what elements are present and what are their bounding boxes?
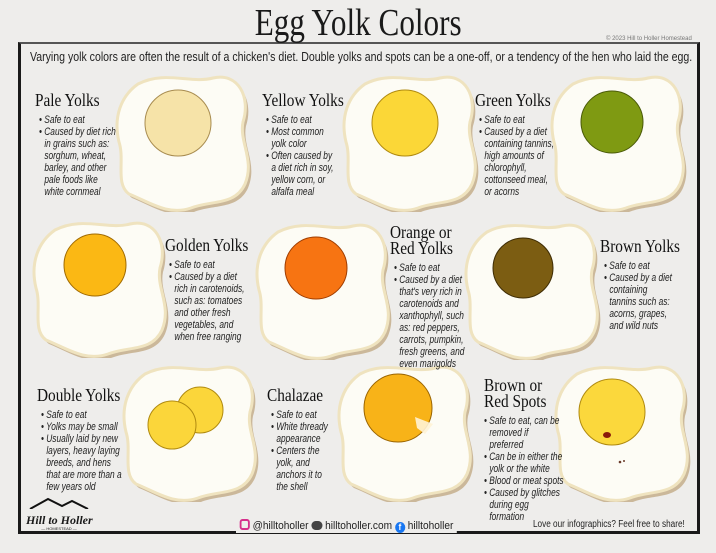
text: yellow yolks xyxy=(262,90,344,198)
text: yellow yolks: Most common yolk color xyxy=(271,126,324,150)
egg: spots xyxy=(554,366,690,502)
text: chalazae: Safe to eat xyxy=(276,409,317,421)
text: golden yolks: Safe to eat xyxy=(174,259,215,271)
text: green yolks: Caused by a diet containing tannins, high amounts of chlorophyll, cottonseed meal, or acorns xyxy=(484,126,554,198)
footer social: @hilltoholler hilltoholler.com hilltoholler xyxy=(253,520,453,532)
egg: green xyxy=(550,76,686,212)
text: green yolks: Safe to eat xyxy=(484,114,525,126)
text: golden yolks: Golden Yolks xyxy=(165,235,248,255)
logo xyxy=(26,498,93,531)
text: double yolks: Yolks may be small xyxy=(46,421,118,433)
text: double yolks: Double Yolks xyxy=(37,385,120,405)
title: Egg Yolk Colors xyxy=(255,2,461,44)
text: chalazae: Chalazae xyxy=(267,385,323,405)
text: green yolks xyxy=(475,90,554,198)
text: brown yolks: Safe to eat xyxy=(609,260,650,272)
text: double yolks: Safe to eat xyxy=(46,409,87,421)
copyright: © 2023 Hill to Holler Homestead xyxy=(606,36,692,42)
text: orange or red yolks: Safe to eat xyxy=(399,262,440,274)
logo: Hill to Holler xyxy=(26,513,93,527)
text: chalazae: Centers the yolk, and anchors it to the shell xyxy=(276,445,322,493)
subtitle: Varying yolk colors are often the result of a chicken's diet. Double yolks and spots can be a one-off, or a tendency of the hen who laid the egg. xyxy=(30,50,692,64)
egg: golden xyxy=(32,222,168,358)
text: pale yolks: Safe to eat xyxy=(44,114,85,126)
text: brown or red spots: Can be in either the yolk or the white xyxy=(489,451,562,475)
text: brown yolks xyxy=(600,236,680,332)
egg: brown xyxy=(464,224,600,360)
egg: chalazae xyxy=(338,366,474,502)
text: chalazae xyxy=(267,385,328,493)
text: orange or red yolks: Caused by a diet that's very rich in carotenoids and xanthophyll, such as: red peppers, carrots, pumpkin, fresh greens, and even marigolds xyxy=(399,274,464,370)
text: yellow yolks: Yellow Yolks xyxy=(262,90,344,110)
text: brown or red spots: Safe to eat, can be removed if preferred xyxy=(489,415,559,451)
footer share note: Love our infographics? Feel free to share! xyxy=(533,519,685,530)
text: yellow yolks: Safe to eat xyxy=(271,114,312,126)
egg: pale xyxy=(116,76,252,212)
text: green yolks: Green Yolks xyxy=(475,90,551,110)
text: yellow yolks: Often caused by a diet rich in soy, yellow corn, or alfalfa meal xyxy=(271,150,333,198)
text: golden yolks xyxy=(165,235,248,343)
text: brown yolks: Brown Yolks xyxy=(600,236,680,256)
text: orange or red yolks: Orange or xyxy=(390,222,452,242)
text: double yolks: Usually laid by new layers, heavy laying breeds, and hens that are more than a few years old xyxy=(46,433,122,493)
text: brown or red spots xyxy=(484,375,564,523)
egg: yellow xyxy=(342,76,478,212)
text: brown or red spots: Red Spots xyxy=(484,391,546,411)
text: brown or red spots: Blood or meat spots xyxy=(489,475,564,487)
text: chalazae: White thready appearance xyxy=(276,421,328,445)
text: orange or red yolks xyxy=(390,222,465,370)
text: brown yolks: Caused by a diet containing tannins such as: acorns, grapes, and wild nuts xyxy=(609,272,672,332)
egg: double xyxy=(122,366,258,502)
text: golden yolks: Caused by a diet rich in carotenoids, such as: tomatoes and other fresh vegetables, and when free ranging xyxy=(174,271,244,343)
logo: — HOMESTEAD — xyxy=(41,526,77,531)
footer social: f xyxy=(399,522,401,532)
text: brown or red spots: Brown or xyxy=(484,375,542,395)
text: orange or red yolks: Red Yolks xyxy=(390,238,453,258)
text: pale yolks: Pale Yolks xyxy=(35,90,100,110)
egg: orange xyxy=(256,224,392,360)
text: pale yolks xyxy=(35,90,116,198)
text: pale yolks: Caused by diet rich in grains such as: sorghum, wheat, barley, and other pale foods like white cornmeal xyxy=(44,126,116,198)
text: brown or red spots: Caused by glitches during egg formation xyxy=(489,487,560,523)
text: double yolks xyxy=(37,385,122,493)
